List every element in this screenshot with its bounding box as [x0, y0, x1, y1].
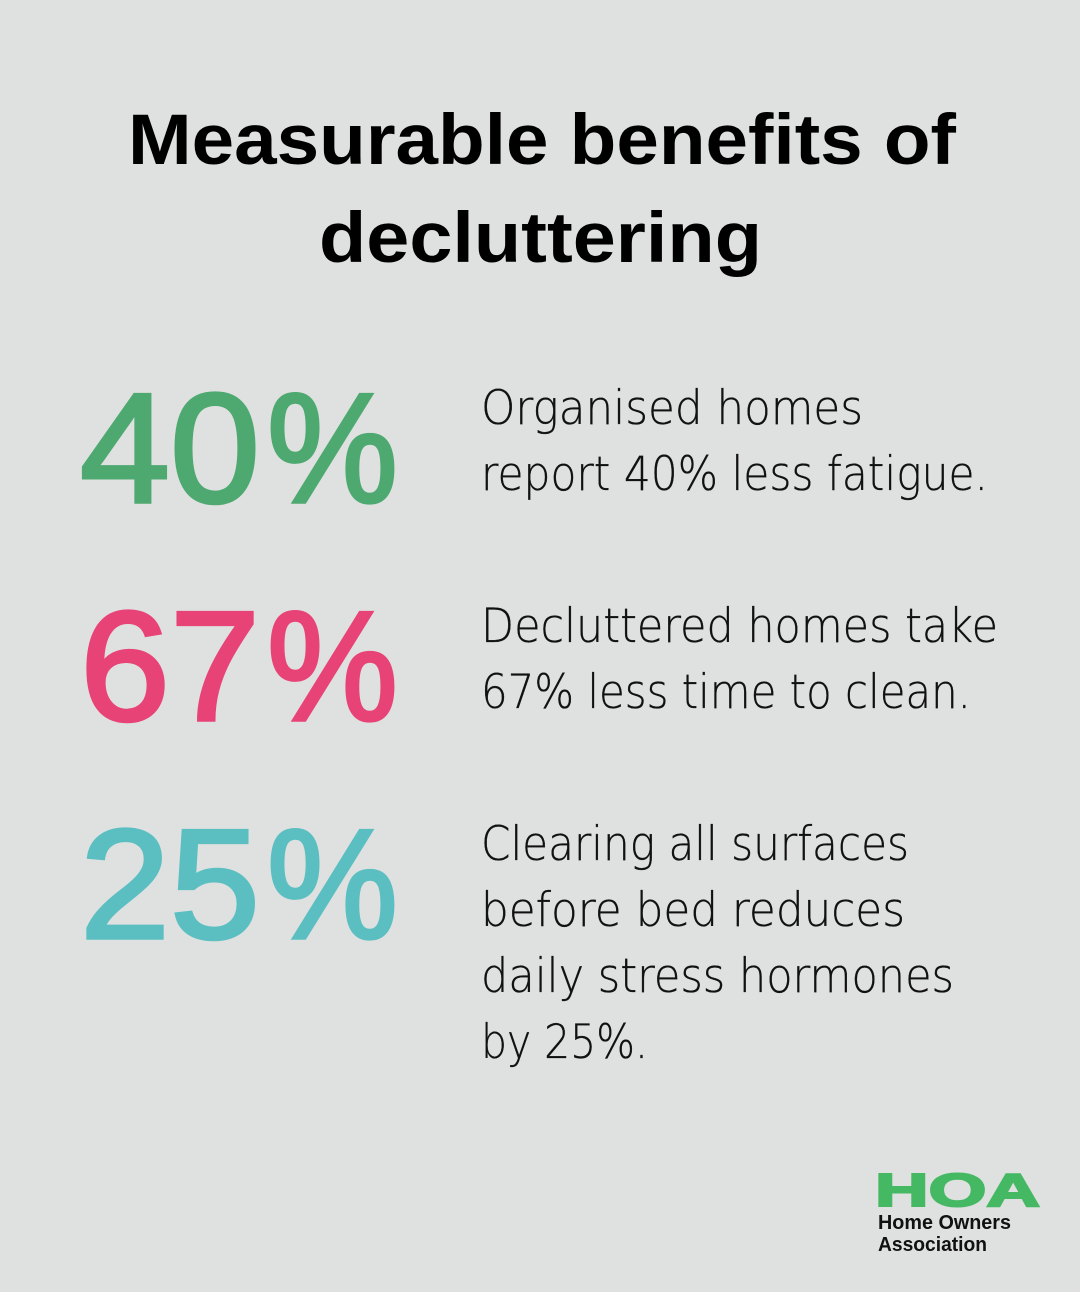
text: stress benefit — [481, 817, 954, 1070]
logo: Home Owners Association — [875, 1164, 1040, 1256]
text: fatigue benefit — [481, 381, 988, 502]
text: cleaning benefit: 67% less time to clean. — [481, 665, 971, 720]
logo: Home Owners Association: HOA — [875, 1164, 1040, 1216]
text: cleaning benefit: Decluttered homes take — [481, 599, 998, 654]
text: fatigue benefit: Organised homes — [481, 381, 863, 436]
text: stress benefit: daily stress hormones — [481, 949, 954, 1004]
text: stress benefit: by 25%. — [481, 1015, 648, 1070]
stat: 40% — [80, 362, 398, 536]
title — [128, 101, 956, 278]
stat: 67% — [80, 580, 398, 754]
stat: 25%: 25 — [80, 798, 260, 972]
title: decluttering — [319, 199, 762, 278]
stat: 25% — [80, 798, 398, 972]
logo: Home Owners Association: Home Owners — [878, 1212, 1011, 1234]
logo: Home Owners Association: Association — [878, 1234, 987, 1256]
text: fatigue benefit: report 40% less fatigue. — [481, 447, 988, 502]
stat: 40%: 40 — [80, 362, 260, 536]
stat: 67%: % — [267, 580, 398, 754]
stat: 40%: % — [267, 362, 398, 536]
stat: 67%: 67 — [80, 580, 260, 754]
text: stress benefit: Clearing all surfaces — [481, 817, 909, 872]
title: Measurable benefits of — [128, 101, 956, 180]
text: stress benefit: before bed reduces — [481, 883, 905, 938]
text: cleaning benefit — [481, 599, 998, 720]
stat: 25%: % — [267, 798, 398, 972]
